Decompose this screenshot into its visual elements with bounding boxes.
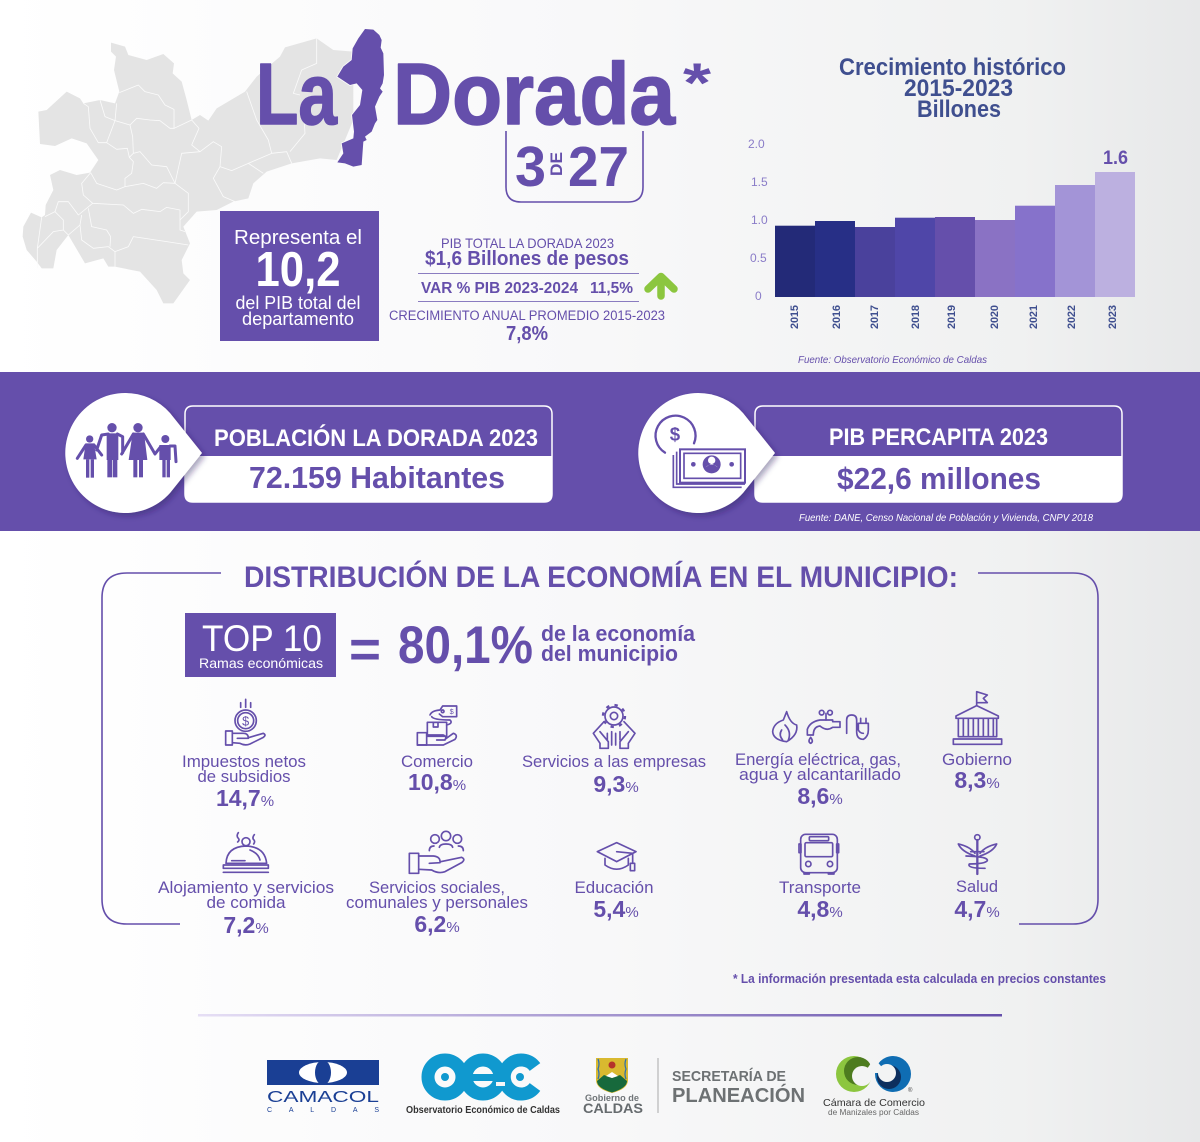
panel: purple band: Fuente: DANE, Censo Nacional de Población y Vivienda, CNPV 2018 (799, 513, 1093, 524)
icon: caduceus (958, 835, 997, 874)
map: Caldas department (23, 38, 353, 303)
text block: PIB stats: PIB TOTAL LA DORADA 2023 (441, 235, 614, 251)
chart title: 2015-2023 (904, 75, 1013, 102)
item: salud: Salud (956, 877, 998, 896)
icon: green up arrow (648, 276, 674, 296)
icon: money: $ (670, 424, 681, 445)
callout: población: 72.159 Habitantes (249, 460, 505, 495)
rank: 3 de 27: 27 (568, 135, 629, 199)
bar chart: 2016 (831, 305, 843, 329)
logo: Cámara de Comercio: Cámara de Comercio (823, 1097, 925, 1109)
bar chart: 2022 (1066, 305, 1078, 329)
icon: government building (953, 692, 1002, 744)
rank: 3 de 27 (506, 131, 643, 202)
text block: PIB stats: 11,5% (590, 280, 633, 297)
icon: gear and hands (593, 705, 635, 748)
bar chart: 1.6 (1103, 148, 1128, 169)
item: impuestos: Impuestos netos (182, 752, 306, 771)
icon: hand with box and tag: $ (450, 707, 454, 716)
bar chart: 0.5 (750, 251, 767, 265)
icon: family (77, 423, 176, 478)
item: gobierno (942, 692, 1012, 793)
summary: top 10 = 80,1%: del municipio (541, 641, 678, 666)
summary: top 10 = 80,1%: de la economía (541, 621, 696, 646)
title: La Dorada: * (683, 51, 711, 114)
logo: Cámara de Comercio: ® (908, 1087, 913, 1094)
bar chart: 2015 (789, 305, 801, 329)
chart title (839, 54, 1066, 123)
bar chart: 2019 (946, 305, 958, 329)
item: energía, gas, agua (735, 710, 901, 809)
item: servicios a las empresas: Servicios a las empresas (522, 752, 706, 771)
rank: 3 de 27: 3 (515, 135, 546, 199)
item: transporte: Transporte (779, 878, 861, 897)
chart title: Crecimiento histórico (839, 54, 1066, 81)
item: alojamiento: de comida (206, 893, 286, 912)
bar chart: 2018 (910, 305, 922, 329)
callout: población (65, 393, 552, 513)
icon: flame, faucet, plug (773, 710, 868, 743)
item: salud: 4,7% (954, 896, 1000, 922)
note: precios constantes: * La información presentada esta calculada en precios constantes (733, 971, 1106, 986)
bar chart: 1.5 (751, 175, 768, 189)
bar chart: 0 (755, 289, 762, 303)
item: servicios a las empresas (522, 705, 706, 797)
bar chart: 2020 (989, 305, 1001, 329)
summary: top 10 = 80,1%: TOP 10 (202, 618, 322, 659)
bar chart (748, 137, 1135, 366)
item: servicios a las empresas: 9,3% (593, 771, 639, 797)
item: servicios sociales: comunales y personales (346, 893, 528, 912)
item: transporte: 4,8% (797, 896, 843, 922)
text block: PIB stats: $1,6 Billones de pesos (425, 248, 629, 270)
icon: coin and hand: $ (242, 714, 249, 728)
item: comercio (401, 706, 473, 795)
logo: Secretaría de Planeación: SECRETARÍA DE (672, 1068, 786, 1085)
panel frame: distribución (102, 573, 1098, 924)
item: energía, gas, agua: Energía eléctrica, gas, (735, 750, 901, 769)
title: La Dorada: La (256, 46, 337, 143)
item: comercio: Comercio (401, 752, 473, 771)
logo: Camacol (267, 1060, 379, 1114)
logo: OEC (406, 1060, 560, 1116)
item: impuestos (182, 699, 306, 811)
item: comercio: 10,8% (408, 769, 466, 795)
summary: top 10 = 80,1%: Ramas económicas (199, 655, 323, 671)
item: impuestos: de subsidios (198, 767, 290, 786)
text block: PIB stats: VAR % PIB 2023-2024 (421, 280, 578, 297)
bar chart: Fuente: Observatorio Económico de Caldas (798, 354, 988, 366)
item: gobierno: Gobierno (942, 750, 1012, 769)
summary: top 10 = 80,1%: 80,1% (398, 616, 533, 675)
item: alojamiento: Alojamiento y servicios (158, 878, 334, 897)
item: transporte (779, 834, 861, 922)
chart title: Billones (917, 96, 1001, 123)
callout: 10,2 del PIB: 10,2 (256, 243, 340, 297)
logo: Secretaría de Planeación (672, 1068, 805, 1107)
logo: Secretaría de Planeación: PLANEACIÓN (672, 1083, 805, 1107)
callout: PIB percápita: $22,6 millones (837, 461, 1041, 496)
title: La Dorada (256, 29, 711, 167)
callout: población: POBLACIÓN LA DORADA 2023 (214, 424, 538, 452)
bar chart: 2017 (869, 305, 881, 329)
title: La Dorada: Dorada (393, 46, 676, 143)
callout: 10,2 del PIB: Representa el (234, 227, 362, 249)
logo: Gobierno de Caldas (583, 1058, 643, 1116)
logo: OEC: Observatorio Económico de Caldas (406, 1105, 560, 1116)
bar chart: 2021 (1028, 305, 1040, 329)
icon: cloche (223, 833, 268, 872)
item: servicios sociales (346, 831, 528, 937)
callout: PIB percápita (638, 393, 1122, 513)
callout: PIB percápita: PIB PERCAPITA 2023 (829, 424, 1048, 451)
summary: top 10 = 80,1%: = (349, 621, 381, 679)
item: alojamiento: 7,2% (223, 912, 269, 938)
text block: PIB stats: 7,8% (506, 323, 548, 345)
bar chart: 2.0 (748, 137, 765, 151)
callout: 10,2 del PIB: del PIB total del (236, 293, 360, 313)
panel: purple band (0, 372, 1200, 531)
item: gobierno: 8,3% (954, 767, 1000, 793)
logo: Cámara de Comercio: de Manizales por Caldas (828, 1108, 919, 1117)
item: educación: 5,4% (593, 896, 639, 922)
item: salud (954, 835, 1000, 922)
logo: Camacol: CAMACOL (267, 1089, 379, 1106)
item: educación: Educación (574, 878, 654, 897)
summary: top 10 = 80,1% (185, 613, 696, 679)
icon: money (656, 416, 745, 487)
item: impuestos: 14,7% (216, 785, 274, 811)
item: educación (574, 843, 654, 922)
icon: graduation cap (597, 843, 636, 871)
callout: 10,2 del PIB (220, 211, 379, 341)
callout: 10,2 del PIB: departamento (242, 309, 354, 329)
icon: hand with people (409, 831, 464, 873)
logo: Cámara de Comercio (823, 1056, 925, 1117)
item: servicios sociales: Servicios sociales, (369, 878, 505, 897)
bar chart: 1.0 (751, 213, 768, 227)
logo: Gobierno de Caldas: Gobierno de (585, 1093, 639, 1103)
item: servicios sociales: 6,2% (414, 911, 460, 937)
bar chart: 2023 (1107, 305, 1119, 329)
item: energía, gas, agua: agua y alcantarillado (739, 765, 901, 784)
text block: PIB stats: CRECIMIENTO ANUAL PROMEDIO 2015-2023 (389, 308, 665, 323)
logo: Camacol: C A L D A S (267, 1107, 379, 1114)
icon: bus (799, 834, 839, 874)
item: energía, gas, agua: 8,6% (797, 783, 843, 809)
text block: PIB stats (389, 235, 674, 345)
heading: distribución de la economía: DISTRIBUCIÓN DE LA ECONOMÍA EN EL MUNICIPIO: (244, 560, 958, 594)
icon: La Dorada municipality silhouette (337, 29, 384, 167)
logo: Gobierno de Caldas: CALDAS (583, 1100, 643, 1116)
item: alojamiento (158, 833, 334, 938)
rank: 3 de 27: DE (547, 152, 566, 176)
